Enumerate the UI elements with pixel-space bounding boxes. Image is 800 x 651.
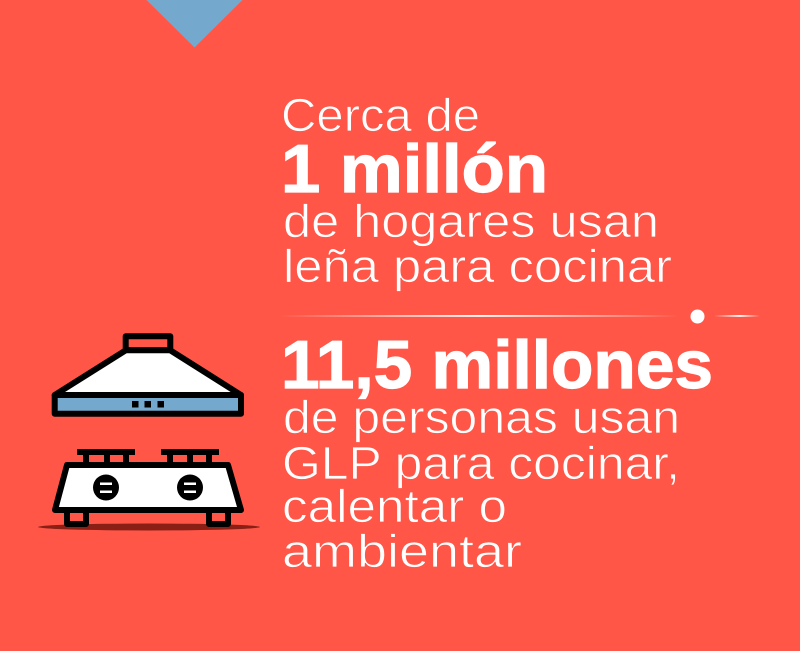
hood canopy [55, 350, 241, 395]
stove feet [67, 510, 86, 524]
text: leña para cocinar: leña para cocinar [283, 240, 672, 292]
right knob [177, 474, 203, 500]
hood collar [126, 336, 170, 350]
text: calentar o: calentar o [282, 480, 507, 532]
text: Cerca de: Cerca de [281, 89, 480, 141]
text: de hogares usan: de hogares usan [283, 195, 659, 247]
hood buttons [132, 401, 164, 408]
text: ambientar: ambientar [282, 525, 522, 577]
text: GLP para cocinar,: GLP para cocinar, [282, 437, 680, 489]
text block: firewood households [281, 89, 672, 292]
icon: gas stove [55, 452, 241, 524]
blue triangle pointer [146, 0, 242, 48]
right burner [161, 452, 219, 465]
left knob [93, 474, 119, 500]
icon: extractor hood [55, 336, 241, 414]
text: 1 millón: 1 millón [281, 131, 548, 207]
stove shadow [38, 524, 260, 530]
left burner [77, 452, 135, 465]
hood blue front panel [55, 395, 241, 414]
stove body [55, 465, 241, 510]
text: 11,5 millones: 11,5 millones [281, 327, 713, 403]
text block: LPG users [281, 327, 713, 577]
text: de personas usan: de personas usan [283, 391, 680, 443]
divider line with dot [279, 310, 760, 324]
